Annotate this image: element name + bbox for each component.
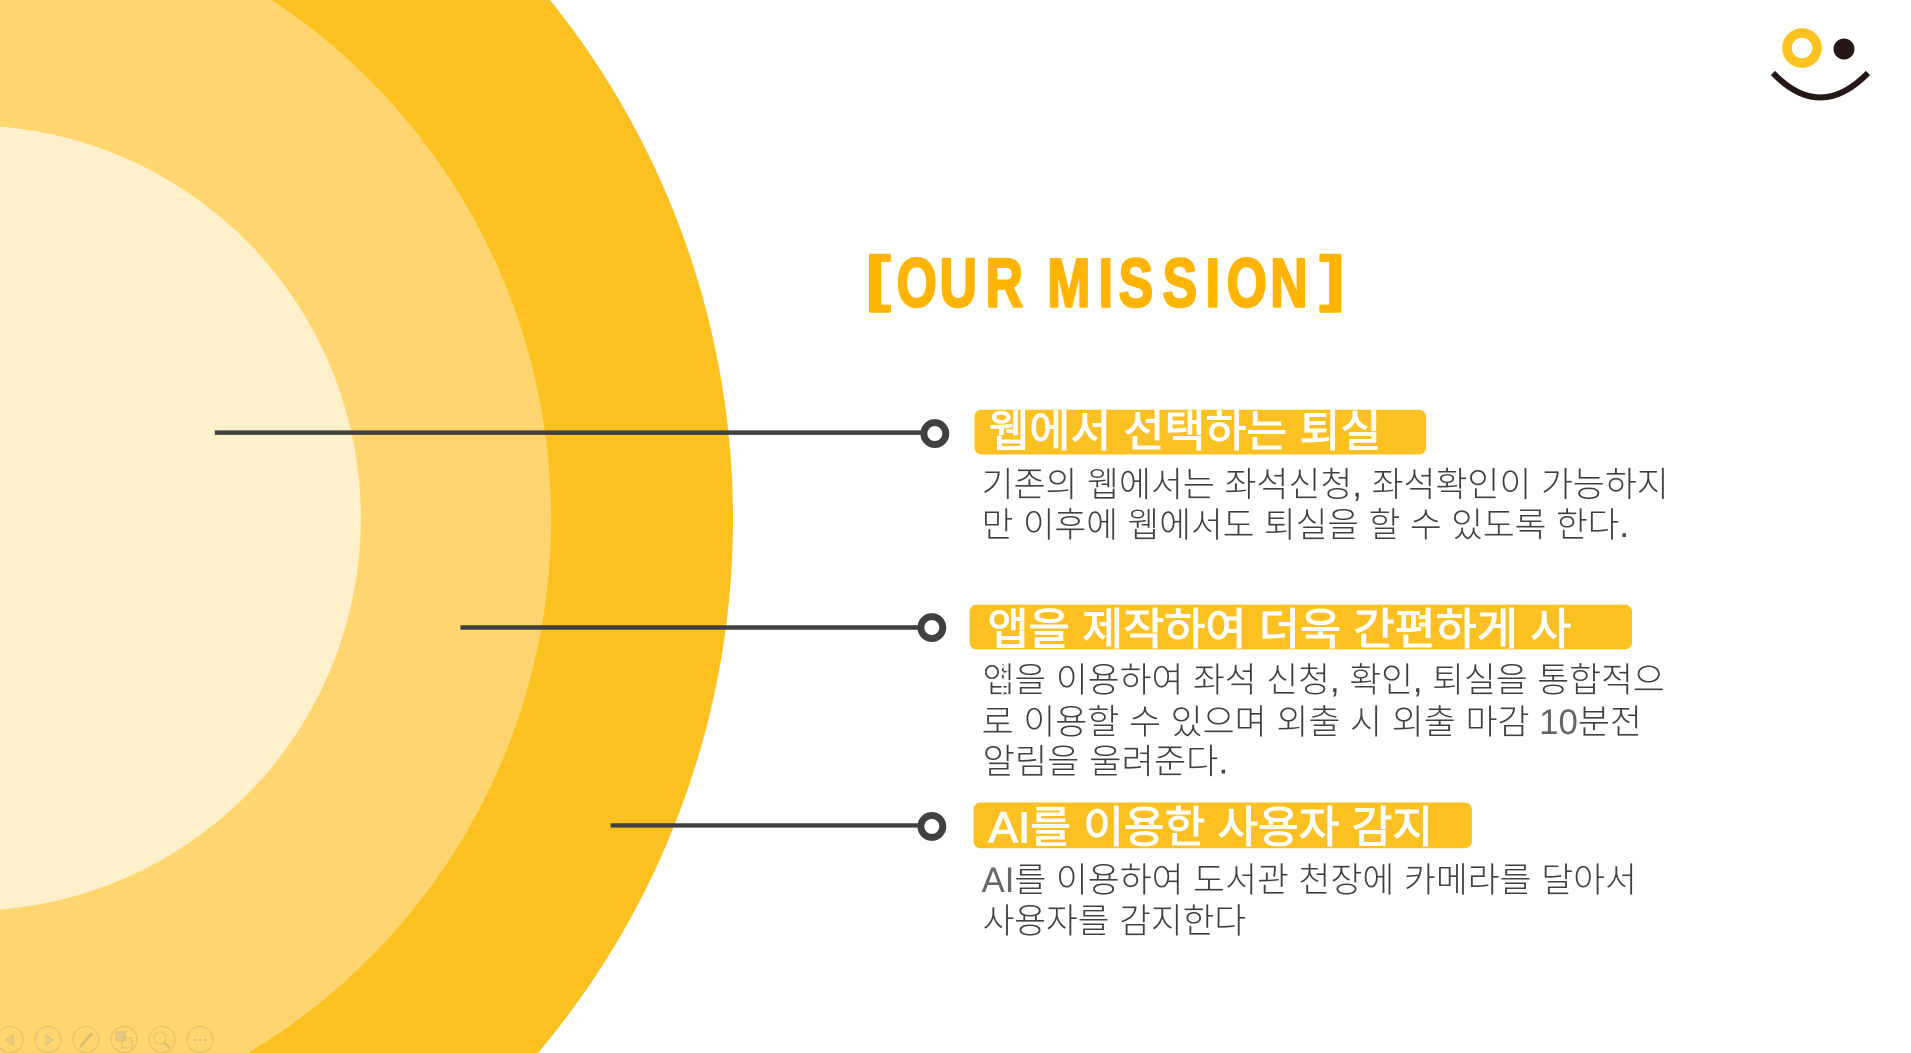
background concentric circles [0,0,733,1053]
body 1: 기존의 웹에서는 좌석신청, 좌석확인이 가능하지 [982,465,1669,504]
item 3 [611,803,1637,941]
body 3 [982,861,1637,941]
logo: smiling face [1773,33,1868,98]
body 2 [982,661,1665,782]
connector dot 2 [921,617,943,638]
connector dot 3 [921,815,943,837]
body 1: 만 이후에 웹에서도 퇴실을 할 수 있도록 한다. [982,506,1629,545]
connector line 1 [215,430,925,435]
connector line 3 [611,823,923,828]
heading bar 3 [974,803,1472,848]
body 3: AI를 이용하여 도서관 천장에 카메라를 달아서 [982,861,1637,900]
title: ] [1320,246,1344,313]
heading bar 2 [970,605,1632,649]
body 2: 로 이용할 수 있으며 외출 시 외출 마감 10분전 [982,703,1642,742]
heading 3: AI를 이용한 사용자 감지 [989,803,1433,852]
item 2 [460,605,1665,782]
body 3: 사용자를 감지한다 [983,902,1246,941]
heading 1: 웹에서 선택하는 퇴실 [989,408,1381,457]
connector line 2 [460,625,923,630]
heading 2: 앱을 제작하여 더욱 간편하게 사 [988,605,1571,654]
slide toolbar icons [0,1026,213,1052]
slide content [215,408,1669,941]
body 1 [982,465,1669,545]
connector dot 1 [924,423,946,445]
title: [ [866,246,890,313]
heading bar 1 [975,410,1426,454]
title: OUR MISSION [897,244,1308,321]
body 2: 알림을 울려준다. [983,743,1228,782]
body 2: 앱을 이용하여 좌석 신청, 확인, 퇴실을 통합적으 [983,661,1665,700]
item 1 [215,408,1669,545]
